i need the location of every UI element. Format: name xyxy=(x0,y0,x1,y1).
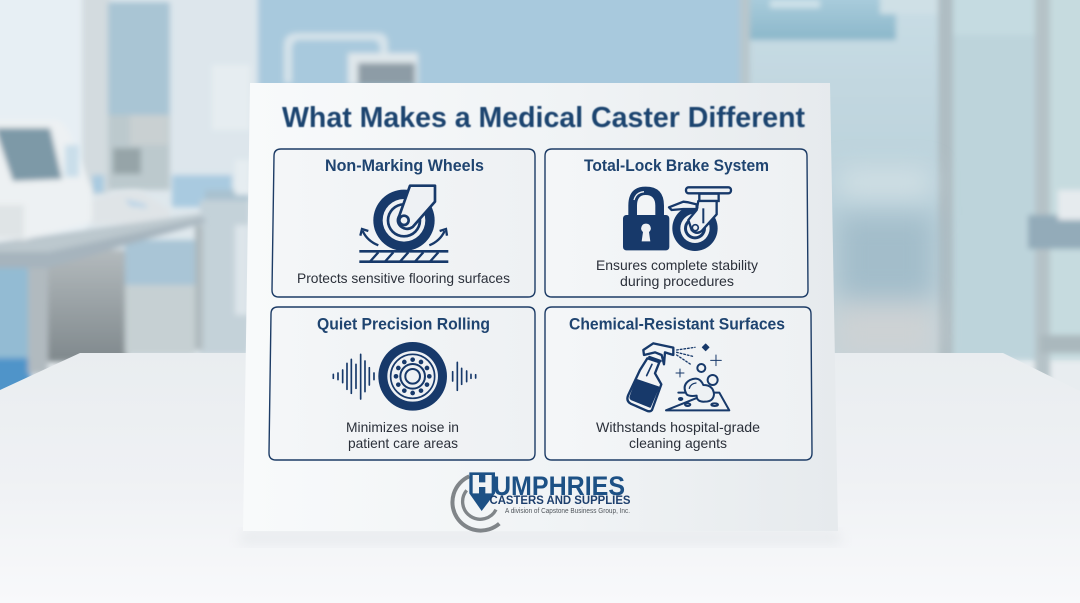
panel: non-marking wheels xyxy=(272,149,535,297)
caption: Minimizes noise in xyxy=(346,419,459,435)
icon: spray bottle and foam xyxy=(627,343,729,411)
white table top xyxy=(0,353,1080,603)
panel: quiet precision rolling xyxy=(269,307,535,460)
caption xyxy=(596,257,758,289)
logo: Humphries Casters and Supplies xyxy=(452,471,630,531)
brand division line: A division of Capstone Business Group, Inc. xyxy=(505,508,630,515)
caption: patient care areas xyxy=(348,435,458,451)
title: What Makes a Medical Caster Different xyxy=(282,102,805,134)
heading: non-marking wheels: Non-Marking Wheels xyxy=(325,157,484,175)
panel: chemical-resistant surfaces xyxy=(545,307,812,460)
caption: during procedures xyxy=(620,273,734,289)
caption: Protects sensitive flooring surfaces xyxy=(297,270,510,286)
heading: quiet precision rolling: Quiet Precision Rolling xyxy=(317,316,490,334)
caption xyxy=(596,419,760,451)
brand name: UMPHRIES xyxy=(493,471,625,501)
panel: total-lock brake system xyxy=(545,149,808,297)
icon: caster wheel on floor xyxy=(359,186,448,262)
blurred clinic background xyxy=(0,0,1080,398)
icon: bearing with sound waves xyxy=(333,342,476,411)
sign shadow on table xyxy=(238,530,843,545)
caption: Ensures complete stability xyxy=(596,257,758,273)
caption: Withstands hospital-grade xyxy=(596,419,760,435)
heading: chemical-resistant surfaces: Chemical-Resistant Surfaces xyxy=(569,316,785,334)
icon: padlock and braked caster xyxy=(623,187,731,251)
icon: grey ring arcs xyxy=(452,476,499,531)
brand subtitle: CASTERS AND SUPPLIES xyxy=(490,493,630,507)
heading: total-lock brake system: Total-Lock Brake System xyxy=(584,157,769,175)
sign board xyxy=(243,83,838,531)
caption: cleaning agents xyxy=(629,435,727,451)
icon: navy shield with H xyxy=(469,472,495,511)
caption xyxy=(346,419,459,451)
